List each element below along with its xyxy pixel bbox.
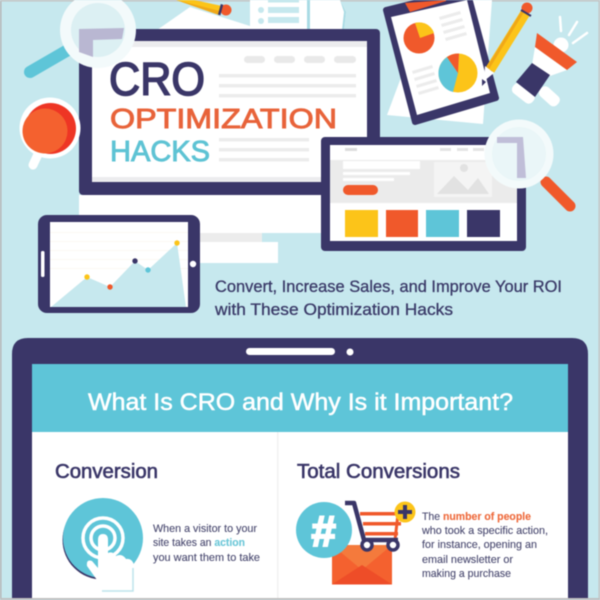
text: total conversions definition bbox=[421, 511, 548, 580]
illustration: laptop screen bbox=[321, 137, 526, 251]
text: total conversions definition: for instance, opening an bbox=[422, 539, 537, 551]
icon: shopping cart bbox=[345, 503, 401, 550]
icon: megaphone bbox=[510, 17, 587, 108]
panel: section heading: What Is CRO and Why Is it Important? bbox=[88, 389, 513, 416]
heading: total conversions: Total Conversions bbox=[297, 461, 460, 483]
title: CRO bbox=[109, 53, 205, 105]
subtitle: Convert, Increase Sales, and Improve Your ROI bbox=[215, 278, 562, 296]
icon: hash circle: # bbox=[311, 507, 336, 556]
illustration: papers behind monitor bbox=[157, 0, 346, 30]
text: conversion definition: When a visitor to your bbox=[153, 523, 257, 535]
icon: right magnifying glass bbox=[484, 120, 570, 206]
text: total conversions definition: making a purchase bbox=[422, 568, 511, 580]
icon: hash circle bbox=[296, 502, 352, 558]
text: conversion definition: site takes an action bbox=[153, 537, 245, 549]
heading: conversion: Conversion bbox=[55, 461, 158, 483]
text: conversion definition: you want them to take bbox=[153, 552, 260, 564]
panel: total conversions bbox=[296, 461, 548, 584]
panel: section heading bbox=[32, 364, 568, 432]
icon: top pencil bbox=[176, 0, 232, 16]
icon: tapping hand bbox=[62, 498, 143, 591]
illustration: tablet with line chart bbox=[38, 215, 200, 313]
text: conversion definition bbox=[153, 523, 260, 564]
text: total conversions definition: who took a specific action, bbox=[421, 525, 548, 537]
text: total conversions definition: email newsletter or bbox=[422, 554, 513, 566]
title: HACKS bbox=[110, 136, 210, 168]
panel: conversion bbox=[55, 461, 260, 591]
text: total conversions definition: The number of people bbox=[422, 511, 531, 523]
subtitle bbox=[214, 278, 562, 319]
icon: envelope bbox=[332, 545, 392, 584]
title: OPTIMIZATION bbox=[110, 103, 337, 134]
icon: left magnifying glass bbox=[30, 0, 136, 72]
illustration: desktop monitor bbox=[79, 29, 380, 263]
icon: plus badge bbox=[394, 502, 416, 522]
illustration: clipboard with pie charts bbox=[386, 0, 496, 124]
icon: large pencil bbox=[482, 2, 532, 86]
title bbox=[109, 53, 337, 168]
panel: laptop frame bbox=[0, 338, 600, 600]
subtitle: with These Optimization Hacks bbox=[214, 301, 453, 319]
icon: red cup bbox=[20, 98, 80, 165]
